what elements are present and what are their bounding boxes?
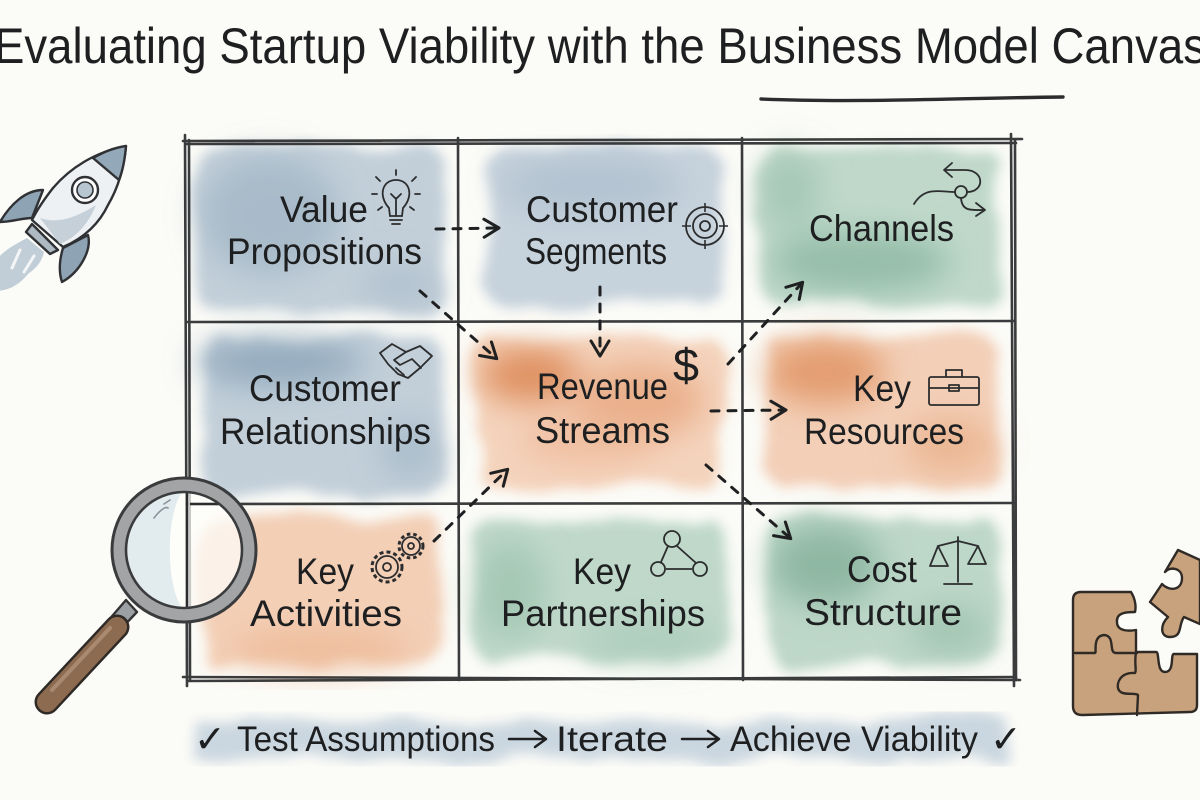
icon: dollar sign: $ xyxy=(673,339,699,391)
banner: process strip: Iterate xyxy=(556,720,668,759)
panel: key resources xyxy=(765,336,998,486)
panel: customer relationships: Customer xyxy=(249,368,401,409)
icon: handshake xyxy=(380,344,432,378)
icon: magnifying glass xyxy=(47,478,256,702)
arrow: revenue to cost xyxy=(706,465,790,538)
panel: channels xyxy=(760,146,1000,304)
banner: process strip: ✓ xyxy=(990,719,1022,761)
panel: key activities: Key xyxy=(296,551,354,592)
banner: process strip xyxy=(192,718,1022,761)
panel: channels: Channels xyxy=(809,208,954,249)
panel: value propositions xyxy=(200,146,444,314)
panel: key resources: Resources xyxy=(804,411,964,452)
arrow: revenue to channels xyxy=(728,283,802,364)
rocket left fin xyxy=(0,190,43,222)
arrow: value to revenue xyxy=(420,291,496,358)
icon: network nodes xyxy=(651,531,707,576)
panel: cost structure xyxy=(768,518,1000,666)
arrow: revenue to resources xyxy=(711,410,785,411)
rocket flame xyxy=(0,238,44,291)
panel: cost structure: Cost xyxy=(847,549,918,590)
panel: key activities xyxy=(198,518,444,672)
panel: value propositions: Value xyxy=(280,189,368,230)
panel: customer segments xyxy=(486,150,728,306)
panel: key partnerships: Partnerships xyxy=(501,593,705,634)
panel: customer relationships xyxy=(195,338,444,494)
rocket right fin xyxy=(60,235,89,282)
panel: cost structure: Structure xyxy=(804,592,962,633)
canvas grid xyxy=(183,134,1022,686)
panel: value propositions: Propositions xyxy=(227,231,422,272)
assembled puzzle xyxy=(1073,592,1197,715)
arrow: segments to revenue xyxy=(598,287,602,355)
rocket body xyxy=(32,146,126,247)
icon: puzzle pieces xyxy=(1073,550,1200,715)
banner: process strip: Test Assumptions xyxy=(237,720,495,759)
panel: key activities: Activities xyxy=(250,593,402,634)
title underline xyxy=(761,97,1063,101)
rocket base xyxy=(26,224,58,254)
icon: gears xyxy=(372,534,423,582)
rocket nose cone xyxy=(93,146,126,180)
arrows: flow between blocks xyxy=(420,228,802,541)
loose puzzle piece xyxy=(1150,550,1200,637)
panel: key partnerships xyxy=(474,522,728,662)
icon: target xyxy=(682,203,728,249)
arrow: value to segments xyxy=(436,228,498,229)
icon: rocket xyxy=(0,146,126,291)
panel: revenue streams: Revenue xyxy=(537,366,668,407)
panel: key resources: Key xyxy=(853,368,911,409)
banner: process strip: ✓ xyxy=(194,719,226,761)
banner: process strip: Achieve Viability xyxy=(730,720,978,759)
panel: revenue streams xyxy=(478,338,724,488)
icon: light bulb xyxy=(372,170,420,224)
icon: toolbox xyxy=(929,370,979,405)
panel: customer segments: Segments xyxy=(525,231,667,272)
panel: key partnerships: Key xyxy=(573,551,631,592)
title xyxy=(0,18,1200,101)
arrow: activities to revenue xyxy=(434,470,507,541)
icon: balance scale xyxy=(930,537,986,584)
icon: route arrows xyxy=(914,163,985,216)
panel: customer relationships: Relationships xyxy=(220,411,431,452)
panel: revenue streams: Streams xyxy=(535,410,670,451)
panel: customer segments: Customer xyxy=(526,189,678,230)
